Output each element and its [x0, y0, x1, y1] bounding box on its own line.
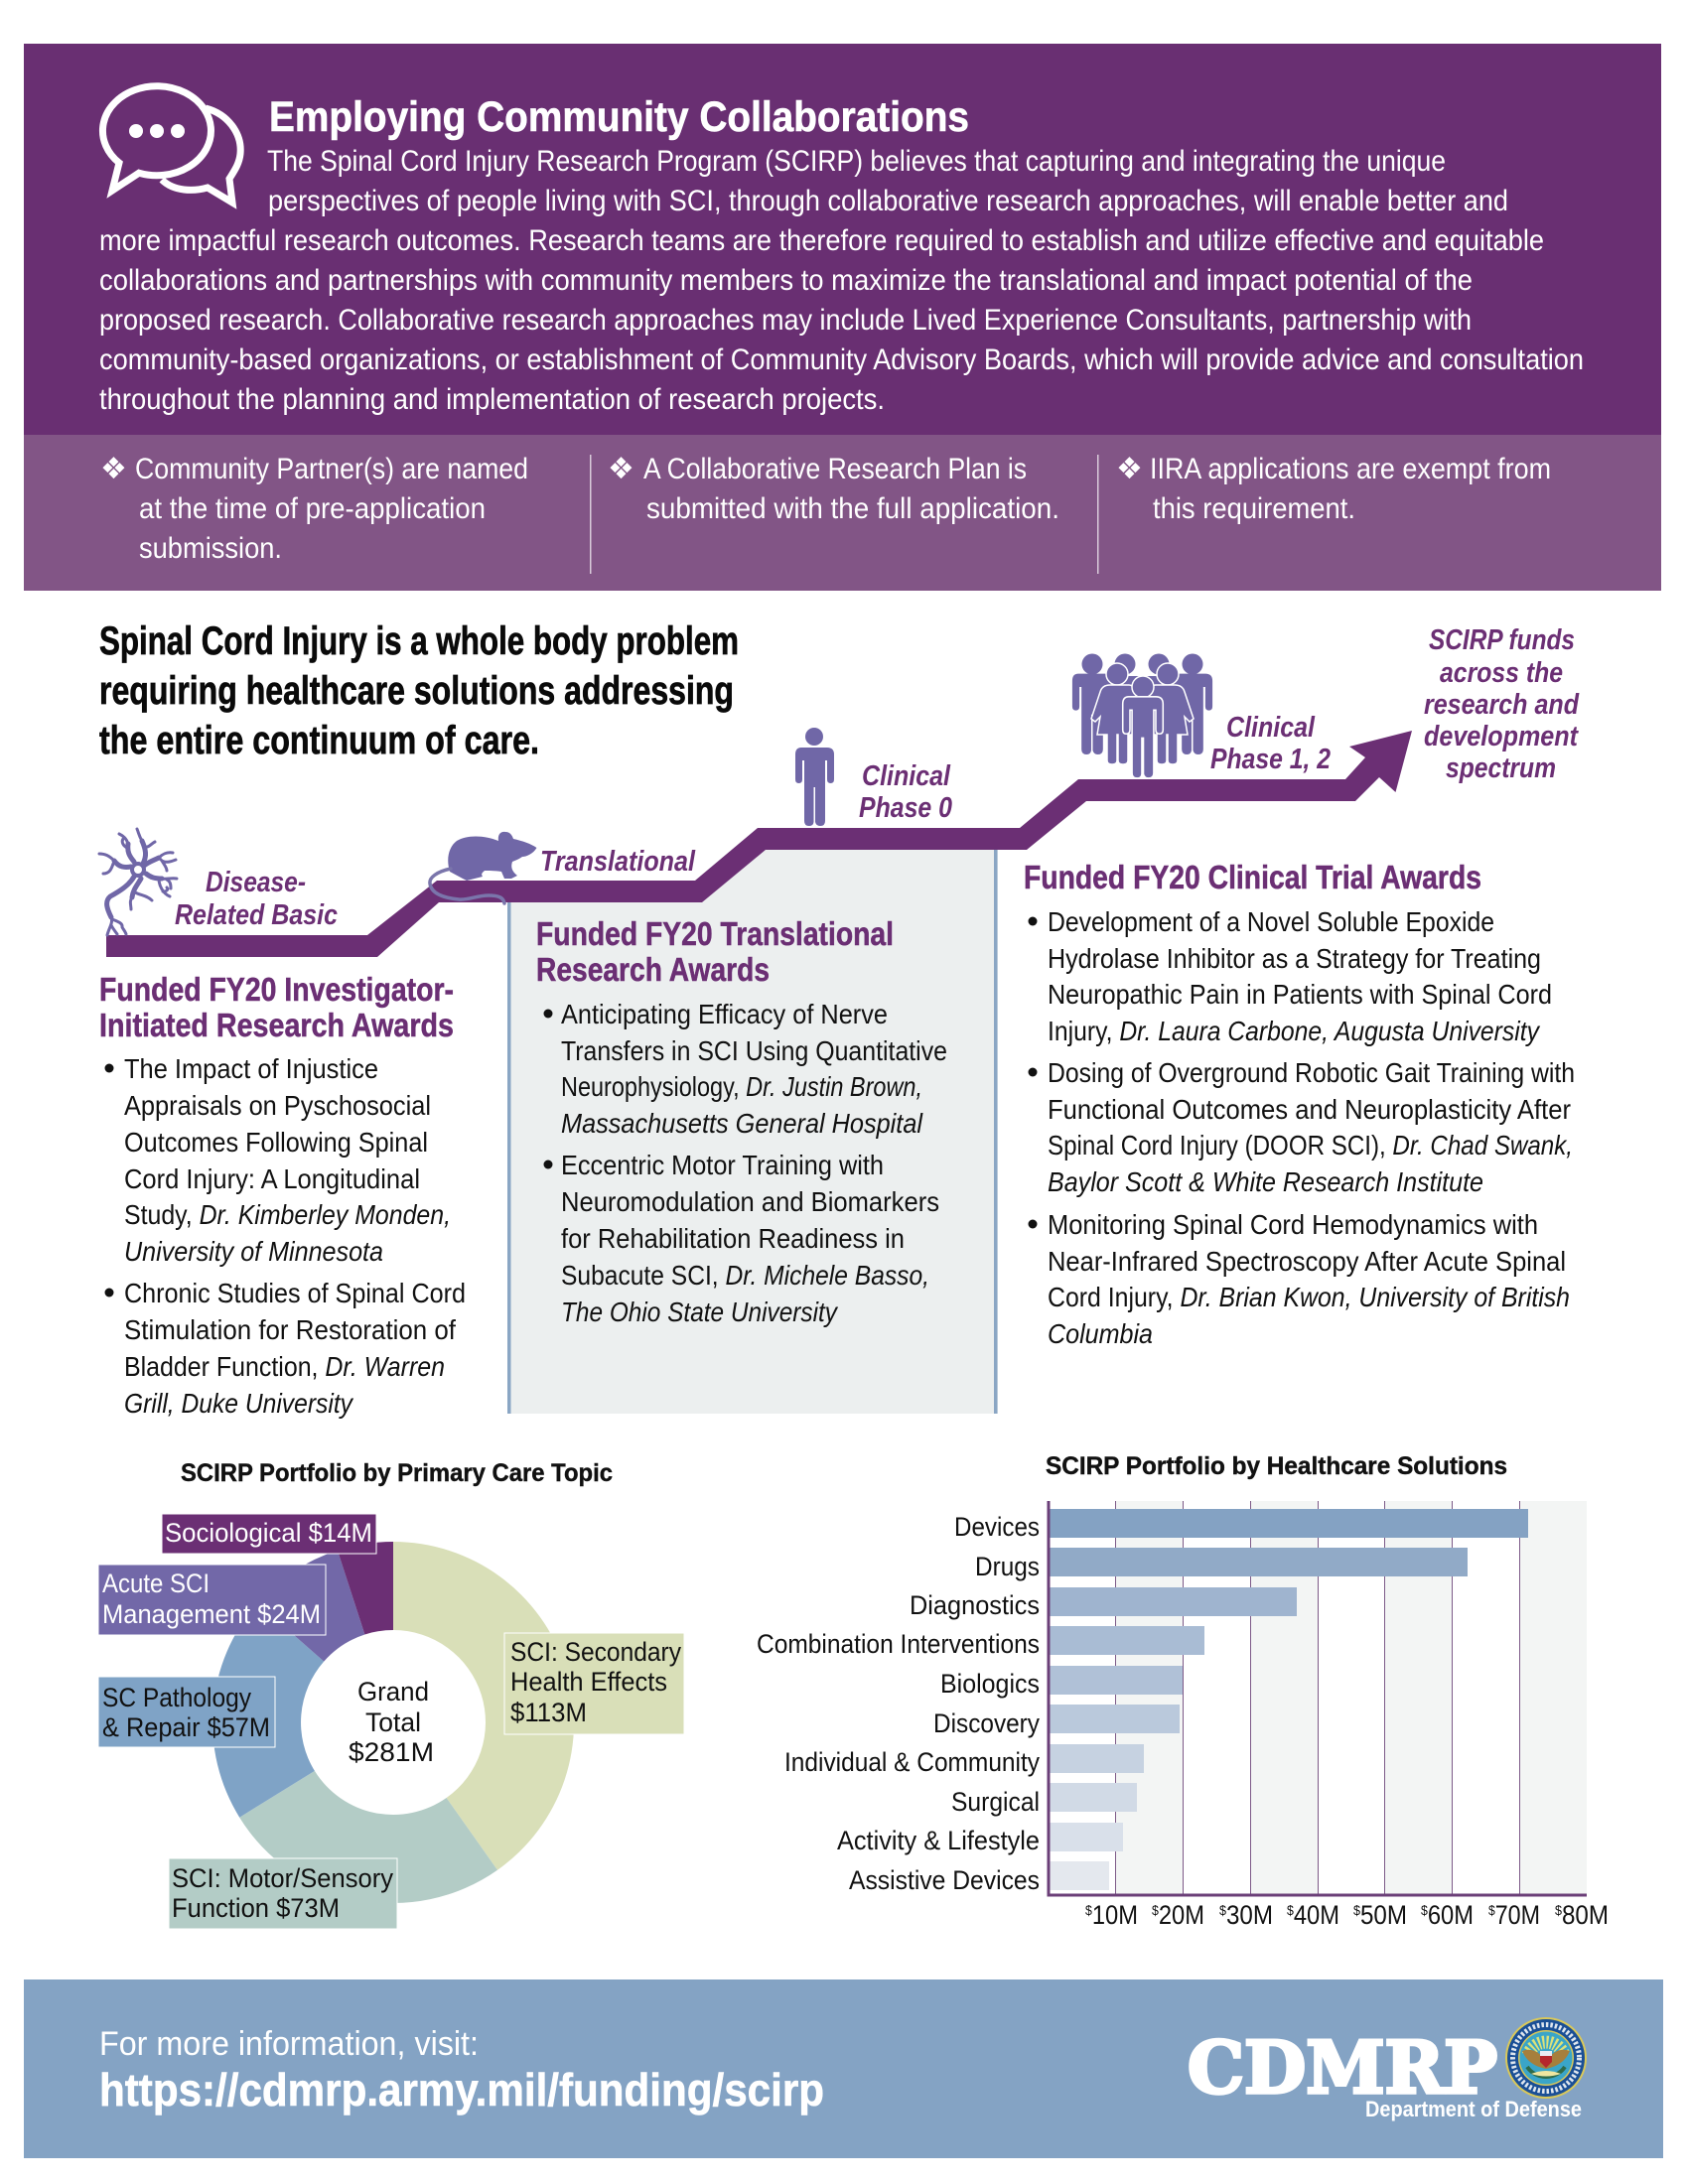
- list: investigator-initiated awards: University of Minnesota: [124, 1236, 383, 1267]
- label: SCIRP funds across the spectrum: spectrum: [1446, 752, 1556, 784]
- category labels: Individual & Community: [784, 1747, 1040, 1777]
- heading: whole body problem: the entire continuum of care.: [99, 719, 539, 762]
- requirement: IIRA exemption: IIRA applications are exempt from: [1150, 453, 1551, 485]
- axes: [1049, 1501, 1587, 1895]
- axis labels: 40M: [1294, 1900, 1339, 1930]
- requirement: community partners: Community Partner(s) are named: [135, 453, 528, 485]
- label: disease-related basic: Related Basic: [175, 899, 338, 931]
- axis labels: 10M: [1092, 1900, 1138, 1930]
- requirement: community partners: ❖: [100, 452, 127, 486]
- text block: program description: proposed research. Collaborative research approaches may include Lived Experience Consultants, partnership with: [99, 304, 1472, 337]
- category labels: Activity & Lifestyle: [837, 1826, 1040, 1855]
- list: investigator-initiated awards: Bladder Function, Dr. Warren: [124, 1351, 445, 1382]
- list: translational awards: Neurophysiology, Dr. Justin Brown,: [561, 1071, 922, 1102]
- label: clinical phase 0: [859, 760, 952, 824]
- logo: department of defense: Department of Defense: [1365, 2097, 1582, 2121]
- label: SC pathology and repair: & Repair $57M: [102, 1712, 270, 1742]
- label: clinical phase 1, 2: Phase 1, 2: [1210, 744, 1331, 775]
- icon: chat bubbles: [102, 86, 240, 203]
- axis labels: $: [1287, 1902, 1294, 1918]
- list: clinical trial awards: Baylor Scott & White Research Institute: [1048, 1166, 1483, 1197]
- axis labels: $: [1219, 1902, 1226, 1918]
- bars: [1049, 1509, 1528, 1890]
- category labels: Surgical: [951, 1787, 1040, 1817]
- axis labels: 50M: [1360, 1900, 1407, 1930]
- requirement: collaborative research plan: submitted with the full application.: [646, 492, 1059, 525]
- label: SCIRP funds across the spectrum: [1424, 624, 1580, 784]
- label: SCIRP funds across the spectrum: across the: [1440, 657, 1563, 689]
- label: motor/sensory function: [169, 1858, 397, 1929]
- heading: clinical trial awards: Funded FY20 Clinical Trial Awards: [1024, 859, 1481, 895]
- column: clinical trial awards: [1024, 859, 1575, 1349]
- category labels: Combination Interventions: [757, 1629, 1040, 1659]
- label: clinical phase 1, 2: Clinical: [1226, 712, 1316, 744]
- logo: CDMRP wordmark: CDMRP: [1188, 2025, 1497, 2110]
- label: SC pathology and repair: SC Pathology: [102, 1683, 251, 1712]
- heading: investigator-initiated awards: [99, 971, 454, 1043]
- list: clinical trial awards: Neuropathic Pain in Patients with Spinal Cord: [1048, 979, 1552, 1010]
- icon: person: [795, 728, 834, 826]
- label: secondary health effects: SCI: Secondary: [510, 1637, 681, 1667]
- label: sociological: Sociological $14M: [165, 1518, 372, 1548]
- list: translational awards: Neuromodulation and Biomarkers: [561, 1186, 939, 1217]
- list: investigator-initiated awards: Cord Injury: A Longitudinal: [124, 1163, 420, 1194]
- label: motor/sensory function: Function $73M: [172, 1893, 340, 1923]
- panel: requirements band: [24, 435, 1661, 591]
- panel: translational background: [507, 850, 998, 1414]
- column: investigator-initiated research awards: [99, 971, 466, 1419]
- icon: department of defense seal: [1505, 2017, 1587, 2099]
- label: clinical phase 0: Phase 0: [859, 792, 952, 824]
- list: translational awards: Anticipating Efficacy of Nerve: [561, 999, 888, 1029]
- label: SCIRP funds across the spectrum: research and: [1424, 689, 1580, 721]
- label: clinical phase 1, 2: [1210, 712, 1331, 775]
- text: website address: https://cdmrp.army.mil/funding/scirp: [99, 2064, 824, 2116]
- heading: translational awards: [536, 915, 894, 988]
- category labels: Devices: [954, 1512, 1040, 1542]
- category labels: Diagnostics: [910, 1590, 1040, 1620]
- heading: whole body problem: Spinal Cord Injury is a whole body problem: [99, 619, 739, 663]
- requirement: collaborative research plan: [608, 452, 1059, 525]
- requirement: collaborative research plan: ❖: [608, 452, 634, 486]
- icon: group of people: [1072, 653, 1212, 778]
- list: clinical trial awards: Spinal Cord Injury (DOOR SCI), Dr. Chad Swank,: [1048, 1130, 1573, 1160]
- list: investigator-initiated awards: Outcomes Following Spinal: [124, 1127, 428, 1158]
- list: translational awards: Subacute SCI, Dr. Michele Basso,: [561, 1260, 929, 1291]
- label: clinical phase 0: Clinical: [862, 760, 951, 792]
- axis labels: $: [1353, 1902, 1360, 1918]
- list: investigator-initiated awards: Stimulation for Restoration of: [124, 1314, 456, 1345]
- category labels: Discovery: [933, 1708, 1040, 1738]
- icon: mouse: [430, 832, 536, 903]
- list: investigator-initiated awards: Grill, Duke University: [124, 1388, 354, 1419]
- chart title: primary care topic: SCIRP Portfolio by Primary Care Topic: [181, 1459, 613, 1487]
- heading: translational awards: Funded FY20 Translational: [536, 915, 894, 952]
- icon: neuron: [99, 829, 177, 935]
- label: secondary health effects: Health Effects: [510, 1667, 667, 1697]
- heading: investigator-initiated awards: Funded FY20 Investigator-: [99, 971, 454, 1008]
- text block: program description: perspectives of people living with SCI, through collaborative research approaches, will enable better and: [268, 185, 1508, 217]
- heading: whole body problem: [99, 619, 739, 762]
- list: translational awards: Eccentric Motor Training with: [561, 1150, 884, 1180]
- label: SCIRP funds across the spectrum: development: [1424, 721, 1579, 752]
- chart title: healthcare solutions: SCIRP Portfolio by Healthcare Solutions: [1046, 1452, 1507, 1480]
- list: translational awards: Transfers in SCI Using Quantitative: [561, 1035, 947, 1066]
- text block: program description: more impactful research outcomes. Research teams are therefore required to establish and utilize effective and equitable: [99, 224, 1544, 257]
- list: investigator-initiated awards: The Impact of Injustice: [124, 1053, 378, 1084]
- list: clinical trial awards: Development of a Novel Soluble Epoxide: [1048, 906, 1494, 937]
- label: acute SCI management: Management $24M: [102, 1599, 321, 1629]
- list: clinical trial awards: Monitoring Spinal Cord Hemodynamics with: [1048, 1209, 1538, 1240]
- heading: translational awards: Research Awards: [536, 951, 770, 988]
- axis labels: 60M: [1428, 1900, 1474, 1930]
- axis labels: 20M: [1159, 1900, 1204, 1930]
- category labels: [757, 1512, 1040, 1895]
- axis labels: 80M: [1562, 1900, 1609, 1930]
- chart: portfolio by healthcare solutions: [757, 1452, 1609, 1930]
- center label: grand total: $281M: [349, 1737, 434, 1767]
- plot bands and grid: [1115, 1501, 1587, 1895]
- panel: footer: [24, 1979, 1663, 2158]
- column: translational research awards: [536, 915, 947, 1327]
- category labels: Drugs: [975, 1552, 1040, 1581]
- label: acute SCI management: [98, 1565, 326, 1635]
- center label: grand total: Total: [365, 1707, 421, 1737]
- heading: employing community collaborations: Employing Community Collaborations: [269, 93, 969, 141]
- list: clinical trial awards: Injury, Dr. Laura Carbone, Augusta University: [1048, 1016, 1541, 1046]
- label: motor/sensory function: SCI: Motor/Sensory: [172, 1863, 393, 1893]
- list: clinical trial awards: Cord Injury, Dr. Brian Kwon, University of British: [1048, 1282, 1570, 1312]
- text: for more information: For more information, visit:: [99, 2025, 479, 2063]
- requirement: collaborative research plan: A Collaborative Research Plan is: [643, 453, 1027, 485]
- list: clinical trial awards: Dosing of Overground Robotic Gait Training with: [1048, 1057, 1575, 1088]
- axis labels: $: [1085, 1902, 1092, 1918]
- center label: grand total: [349, 1677, 434, 1767]
- label: acute SCI management: Acute SCI: [102, 1569, 210, 1598]
- list: translational awards: The Ohio State University: [561, 1297, 839, 1327]
- axis labels: $: [1555, 1902, 1562, 1918]
- list: translational awards: [544, 999, 947, 1327]
- text block: program description: throughout the planning and implementation of research projects.: [99, 383, 885, 416]
- list: translational awards: Massachusetts General Hospital: [561, 1108, 923, 1139]
- requirement: community partners: [100, 452, 528, 565]
- axis labels: $: [1152, 1902, 1159, 1918]
- list: clinical trial awards: Functional Outcomes and Neuroplasticity After: [1048, 1094, 1571, 1125]
- requirement: IIRA exemption: this requirement.: [1153, 492, 1355, 525]
- text block: program description: The Spinal Cord Injury Research Program (SCIRP) believes that capturing and integrating the unique: [267, 145, 1446, 178]
- axis labels: 70M: [1495, 1900, 1540, 1930]
- panel: employing community collaborations: [24, 44, 1661, 435]
- list: clinical trial awards: Near-Infrared Spectroscopy After Acute Spinal: [1048, 1246, 1566, 1277]
- chart: portfolio by primary care topic: [98, 1459, 684, 1929]
- list: investigator-initiated awards: Appraisals on Pyschosocial: [124, 1090, 431, 1121]
- category labels: Assistive Devices: [849, 1865, 1040, 1895]
- axis labels: $: [1421, 1902, 1428, 1918]
- text block: program description: collaborations and partnerships with community members to maximize the translational and impact potential of the: [99, 264, 1473, 297]
- list: investigator-initiated awards: Chronic Studies of Spinal Cord: [124, 1278, 466, 1308]
- list: translational awards: for Rehabilitation Readiness in: [561, 1223, 905, 1254]
- list: investigator-initiated awards: [105, 1053, 466, 1419]
- heading: whole body problem: requiring healthcare solutions addressing: [99, 669, 734, 713]
- axis labels: [1085, 1900, 1609, 1930]
- heading: investigator-initiated awards: Initiated Research Awards: [99, 1007, 454, 1043]
- list: investigator-initiated awards: Study, Dr. Kimberley Monden,: [124, 1199, 451, 1230]
- donut chart: [212, 1542, 574, 1903]
- label: SC pathology and repair: [98, 1677, 275, 1747]
- label: secondary health effects: $113M: [510, 1698, 587, 1727]
- axis labels: $: [1488, 1902, 1495, 1918]
- requirement: IIRA exemption: [1116, 452, 1551, 525]
- text block: program description: [99, 145, 1584, 416]
- requirement: community partners: submission.: [139, 532, 282, 565]
- requirement: IIRA exemption: ❖: [1116, 452, 1143, 486]
- center label: grand total: Grand: [357, 1677, 429, 1706]
- axis labels: 30M: [1226, 1900, 1273, 1930]
- label: SCIRP funds across the spectrum: SCIRP funds: [1429, 624, 1575, 656]
- category labels: Biologics: [940, 1669, 1040, 1699]
- label: secondary health effects: [504, 1633, 684, 1734]
- label: disease-related basic: Disease-: [206, 867, 306, 898]
- label: translational: Translational: [540, 846, 696, 878]
- requirement: community partners: at the time of pre-application: [139, 492, 486, 525]
- list: clinical trial awards: Columbia: [1048, 1318, 1153, 1349]
- list: clinical trial awards: Hydrolase Inhibitor as a Strategy for Treating: [1048, 943, 1541, 974]
- arrow: research and development staircase: [106, 731, 1412, 957]
- list: clinical trial awards: [1029, 906, 1575, 1349]
- label: disease-related basic: [175, 867, 338, 931]
